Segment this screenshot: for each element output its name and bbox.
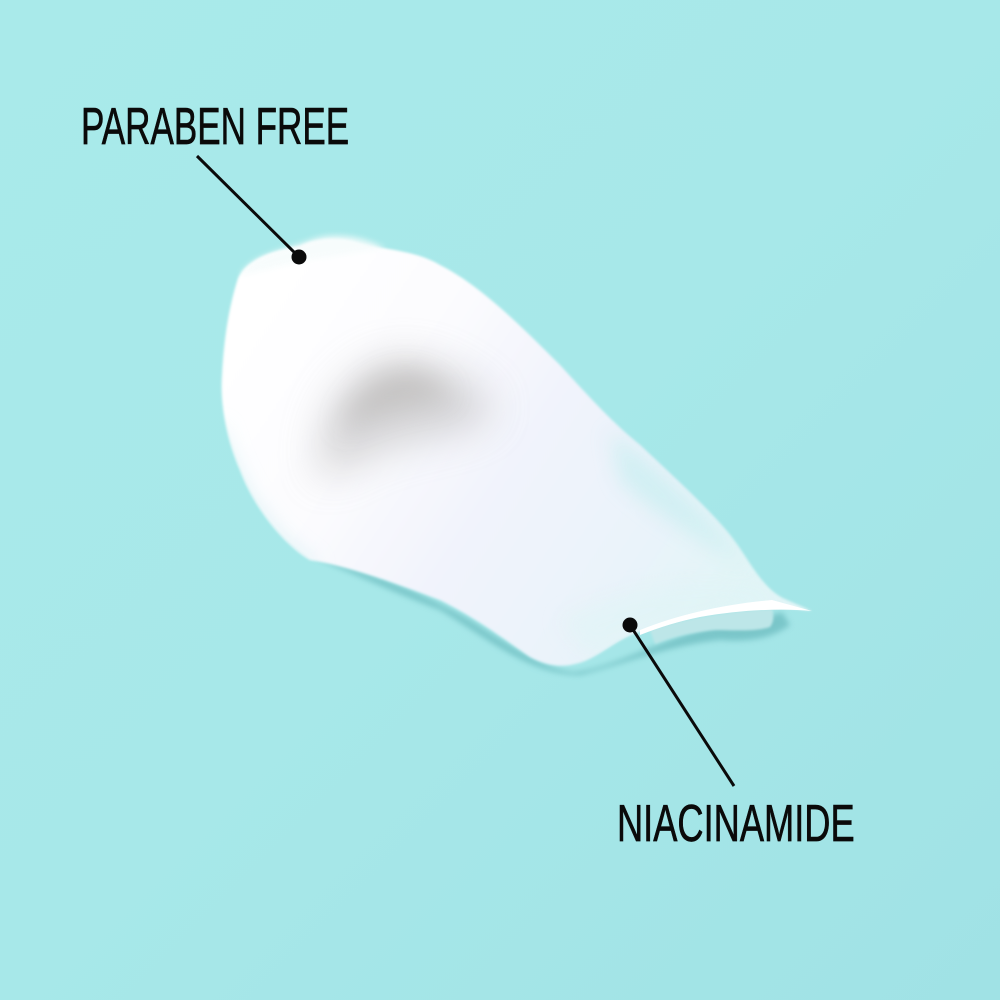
infographic stage [84, 108, 854, 842]
cream top fuzz [240, 235, 385, 276]
cream swatch [205, 235, 812, 666]
cream right fade [609, 436, 729, 552]
label: niacinamide: NIACINAMIDE [617, 795, 855, 853]
cream ridge highlight [640, 600, 812, 635]
label: paraben free: PARABEN FREE [81, 98, 349, 156]
cream dent core [344, 364, 442, 422]
cream left edge tint [232, 440, 313, 558]
cream under-ridge lump [650, 609, 773, 644]
pointer: paraben free [197, 156, 306, 264]
cream dent shading wide [320, 359, 492, 480]
cream lower fade [560, 584, 770, 655]
pointer: niacinamide [622, 618, 734, 786]
cream body [222, 239, 812, 666]
background and cream swatch [196, 154, 812, 787]
cream shading group [232, 344, 729, 558]
cream shadow [310, 556, 790, 675]
